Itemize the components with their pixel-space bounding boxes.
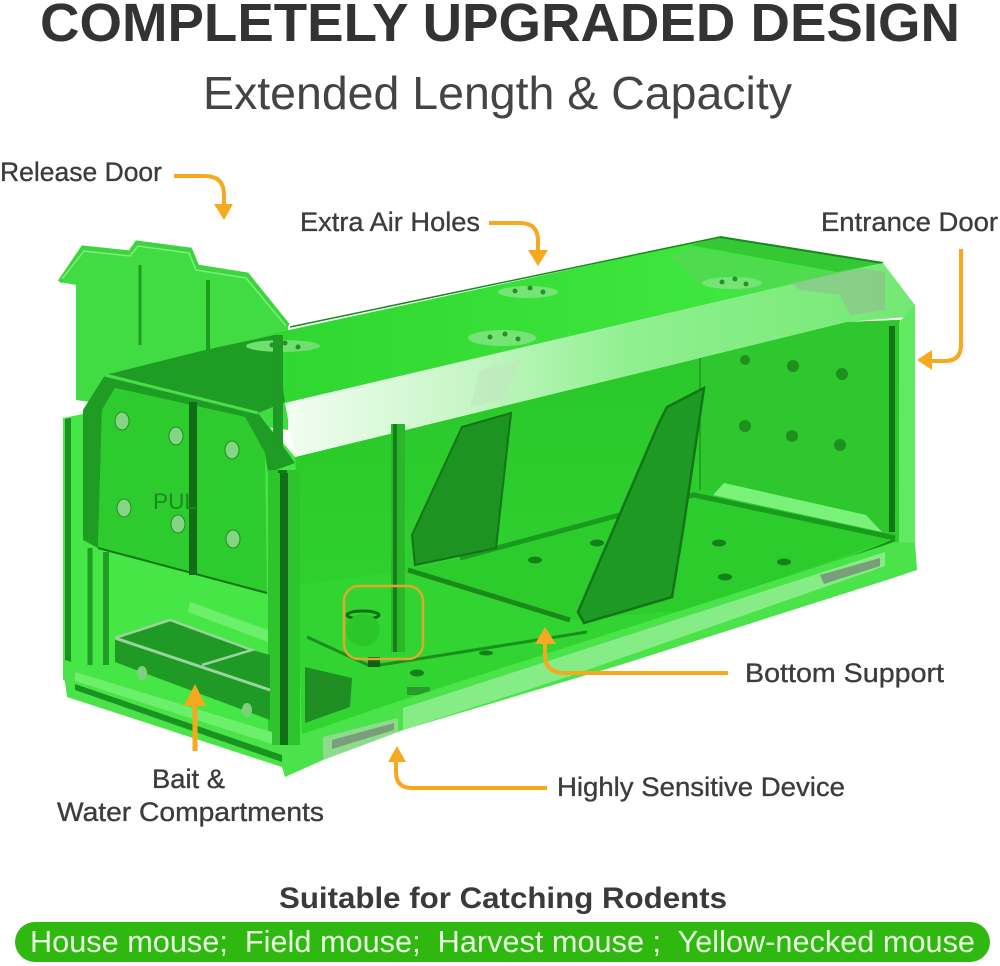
arrow: highly sensitive device <box>388 746 547 788</box>
trap door 1 <box>412 413 511 565</box>
heading: suitable for catching rodents: Suitable for Catching Rodents <box>279 882 727 915</box>
bait and water compartments <box>115 620 352 723</box>
arrow: bait and water <box>184 684 206 751</box>
base rail <box>63 542 917 777</box>
label: extra air holes: Extra Air Holes <box>300 207 480 237</box>
subtitle: Extended Length & Capacity <box>203 67 792 119</box>
label: bait and water compartments <box>57 764 324 827</box>
label: bottom support: Bottom Support <box>745 658 945 688</box>
label: highly sensitive device: Highly Sensitive Device <box>557 772 845 802</box>
top face with air holes <box>105 237 883 413</box>
reflection smudges on band <box>790 268 885 315</box>
floor <box>300 483 900 730</box>
arrow: bottom support <box>535 627 728 673</box>
near side panel <box>63 335 302 767</box>
pull lettering: PUL <box>153 489 197 514</box>
rear wall interior <box>295 320 900 745</box>
white reflective band <box>285 263 915 457</box>
arrow: extra air holes <box>489 223 548 266</box>
product: green rodent trap <box>60 237 917 777</box>
inner post <box>391 424 405 652</box>
arrow: entrance door <box>917 249 961 370</box>
label: bait and water compartments: Water Compartments <box>57 797 324 827</box>
release door <box>60 243 288 430</box>
trap door 2 <box>578 388 704 623</box>
rodent list pill: House mouse; Field mouse; Harvest mouse ; Yellow-necked mouse <box>30 924 975 959</box>
near corner post <box>272 473 300 745</box>
entrance panel <box>700 305 915 548</box>
label: bait and water compartments: Bait & <box>152 764 225 794</box>
label: entrance door: Entrance Door <box>821 207 998 237</box>
label: release door: Release Door <box>0 157 162 187</box>
highlight box: bottom support hole <box>344 586 423 659</box>
arrow: release door <box>174 176 233 220</box>
